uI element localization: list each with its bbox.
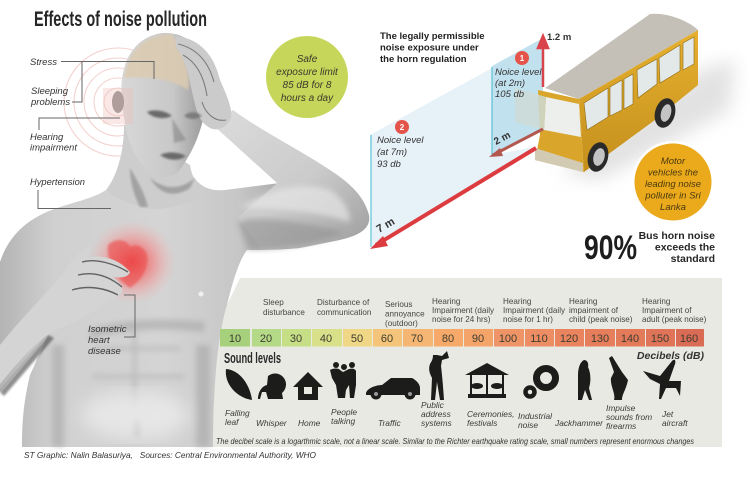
labels under icons: leaf	[225, 417, 240, 427]
effect labels above scale: annoyance	[385, 310, 425, 318]
fingers on chest	[72, 261, 128, 295]
label: noise level at 7 m: 93 db	[377, 159, 401, 170]
callout: safe exposure limit circle: 85 dB for 8	[283, 80, 332, 91]
label: stress: Stress	[30, 57, 57, 68]
effect labels above scale: noise for 1 hr)	[503, 315, 553, 324]
effect labels above scale: Serious	[385, 300, 412, 309]
decibel scale bar: 110	[530, 333, 548, 345]
labels under icons: People	[331, 407, 357, 417]
heart glow	[88, 220, 176, 304]
decibel scale bar: 30	[290, 333, 302, 345]
callout: safe exposure limit circle: hours a day	[281, 93, 334, 104]
effect labels above scale: Hearing	[642, 297, 670, 306]
face features	[147, 110, 202, 160]
icon: carousel	[465, 363, 509, 398]
wheels	[584, 96, 679, 174]
stat: 90 percent bus horn noise: standard	[671, 253, 715, 265]
arrow: 2 m	[493, 129, 543, 155]
label: noise level at 2 m: (at 2m)	[495, 78, 525, 89]
footer credits: ST Graphic: Nalin Balasuriya, Sources: Central Environmental Authority, WHO	[24, 450, 316, 460]
stat: 90 percent bus horn noise: 90%	[584, 229, 637, 267]
callout: body effect labels	[30, 57, 154, 357]
bus side	[579, 30, 698, 172]
icon: public address speaker	[429, 351, 449, 400]
decibel scale bar: 80	[442, 333, 454, 345]
illustration: bus with noise measurement planes	[370, 14, 735, 249]
decibel scale bar: 120	[560, 333, 578, 345]
effect labels above scale: Impairment (daily	[503, 306, 566, 315]
decibel scale bar: 70	[411, 333, 423, 345]
ground shadow	[560, 60, 735, 180]
heading: horn regulation: The legally permissible	[380, 31, 485, 42]
callout: safe exposure limit circle: exposure limit	[276, 67, 339, 78]
labels under icons: talking	[331, 416, 356, 426]
windscreen	[544, 97, 581, 137]
icon: impulse sounds firearm	[609, 356, 628, 400]
decibel scale bar: 100	[499, 333, 517, 345]
effect labels above scale: (outdoor)	[385, 319, 418, 328]
labels under icons: Jet	[661, 409, 674, 419]
effect labels above scale: Hearing	[503, 297, 531, 306]
decibel scale bar: 10	[229, 333, 241, 345]
brain tint	[124, 34, 189, 90]
head	[121, 33, 207, 177]
decibel scale bar: 40	[320, 333, 332, 345]
label: hearing impairment: Hearing	[30, 132, 64, 143]
marker: noise level point 2	[395, 120, 409, 134]
decibel scale bar: 50	[351, 333, 363, 345]
labels under icons: Falling	[225, 408, 250, 418]
icon: industrial gears	[526, 368, 556, 396]
effect labels above scale: Impairment (daily	[432, 306, 495, 315]
heart icon	[108, 240, 147, 288]
decibel scale bar: 140	[621, 333, 639, 345]
effect labels above scale: adult (peak noise)	[642, 315, 707, 324]
hand on chest	[0, 246, 130, 384]
stat: 90 percent bus horn noise	[584, 229, 715, 267]
highlight on abdomen	[80, 391, 190, 439]
label: 7 m: 7 m	[374, 216, 397, 236]
heading: horn regulation: the horn regulation	[380, 54, 467, 65]
bus front	[535, 90, 584, 172]
labels under icons: firearms	[606, 421, 637, 431]
heading: horn regulation: noise exposure under	[380, 42, 479, 54]
torso and left arm	[0, 170, 300, 447]
callout: motor vehicles circle: polluter in Sri	[644, 190, 702, 202]
panel: sound levels	[213, 278, 722, 447]
arrow: 7 m	[376, 148, 536, 245]
icon: jackhammer	[578, 360, 592, 400]
labels under icons: Public	[421, 400, 445, 410]
dark shadow under left arm	[0, 335, 54, 396]
decibel scale bar: 150	[651, 333, 669, 345]
marker: noise level point 1	[515, 51, 529, 65]
raised forearm and upper arm	[213, 110, 369, 250]
labels under icons: sounds from	[606, 412, 652, 422]
label: noise level at 7 m: (at 7m)	[377, 147, 407, 158]
label: isometric heart disease: Isometric	[88, 324, 127, 335]
effect labels above scale: Hearing	[569, 297, 597, 306]
effect labels above scale	[263, 297, 707, 328]
label: 2 m: 2 m	[492, 130, 513, 148]
neck shadow	[130, 168, 195, 207]
plane: 7 metre	[370, 68, 534, 247]
ear	[112, 91, 124, 113]
labels under icons	[225, 400, 688, 431]
decibel scale bar: 90	[472, 333, 484, 345]
door glass	[515, 88, 546, 130]
label: noise level at 2 m: 105 db	[495, 89, 524, 100]
shadow of elbow fold	[238, 219, 345, 250]
label: hypertension: Hypertension	[30, 177, 85, 188]
icon: whisper	[258, 373, 286, 399]
title: Effects of noise pollution	[34, 8, 207, 31]
effect labels above scale: Impairment of	[642, 306, 692, 315]
labels under icons: festivals	[467, 418, 498, 428]
callout: motor vehicles circle	[632, 141, 714, 223]
icon: traffic car	[366, 378, 420, 400]
labels under icons: noise	[518, 420, 538, 430]
heading: sound levels: Sound levels	[224, 350, 281, 367]
labels under icons: address	[421, 409, 452, 419]
label: noise level at 7 m: Noice level	[377, 135, 424, 146]
decibel scale bar: 160	[680, 333, 698, 345]
callout: motor vehicles circle: vehicles the	[648, 168, 698, 178]
effect labels above scale: Disturbance of	[317, 298, 370, 307]
labels under icons: Jackhammer	[554, 418, 604, 428]
label: hearing impairment: impairment	[30, 142, 77, 154]
side windows	[584, 37, 694, 130]
icon: falling leaf	[226, 369, 252, 400]
labels under icons: Whisper	[256, 418, 288, 428]
labels under icons: systems	[421, 418, 453, 428]
label: sleeping problems: Sleeping	[31, 86, 69, 97]
label: 1.2 m: 1.2 m	[547, 32, 571, 43]
labels under icons: aircraft	[662, 418, 688, 428]
labels under icons: Traffic	[378, 418, 401, 428]
fingers on head	[178, 44, 226, 120]
effect labels above scale: disturbance	[263, 308, 305, 317]
bus roof	[545, 14, 698, 99]
nipple	[198, 292, 204, 296]
labels under icons: Industrial	[518, 411, 553, 421]
effect labels above scale: Hearing	[432, 297, 460, 306]
effect labels above scale: noise for 24 hrs)	[432, 315, 491, 324]
callout: safe exposure limit circle	[266, 36, 348, 118]
effect labels above scale: impairment of	[569, 306, 619, 315]
ear highlight box	[103, 88, 133, 124]
lit upper arm	[240, 186, 350, 222]
label: isometric heart disease: heart	[88, 335, 110, 346]
chest and abdominal shading	[52, 320, 210, 447]
decibel scale bar	[220, 329, 704, 346]
stat: 90 percent bus horn noise: Bus horn noise	[639, 230, 715, 242]
decibel scale bar: 60	[381, 333, 393, 345]
plane: 2 metre	[492, 38, 543, 155]
callout: safe exposure limit circle: Safe	[297, 54, 318, 65]
labels under icons: Impulse	[606, 403, 636, 413]
icon: jet aircraft	[643, 360, 681, 399]
label: sleeping problems: problems	[30, 97, 70, 108]
stat: 90 percent bus horn noise: exceeds the	[655, 242, 715, 254]
leader lines	[38, 62, 154, 337]
marker: noise level point 1: 1	[520, 54, 525, 63]
marker: noise level point 2: 2	[400, 123, 405, 132]
icon: people talking	[330, 362, 356, 398]
effect labels above scale: child (peak noise)	[569, 315, 633, 324]
label: decibels: Decibels (dB)	[637, 350, 704, 362]
labels under icons: Home	[298, 418, 321, 428]
effect labels above scale: communication	[317, 308, 371, 317]
decibel scale bar: 20	[260, 333, 272, 345]
callout: motor vehicles circle: leading noise	[645, 179, 701, 190]
decibel scale bar: 130	[591, 333, 609, 345]
callout: motor vehicles circle: Motor	[661, 156, 686, 167]
neck	[106, 125, 208, 209]
bumper	[535, 148, 583, 172]
effect labels above scale: Sleep	[263, 298, 284, 307]
label: noise level at 2 m: Noice level	[495, 67, 542, 78]
label: isometric heart disease: disease	[88, 346, 121, 357]
arrow: 1.2 m height	[538, 36, 548, 87]
callout: motor vehicles circle: Lanka	[660, 202, 686, 213]
labels under icons: Ceremonies,	[467, 409, 514, 419]
icon: home	[293, 372, 323, 400]
hand on head	[176, 36, 231, 129]
illustration: man holding head and chest	[0, 33, 369, 447]
sound wave rings around ear	[64, 48, 172, 156]
